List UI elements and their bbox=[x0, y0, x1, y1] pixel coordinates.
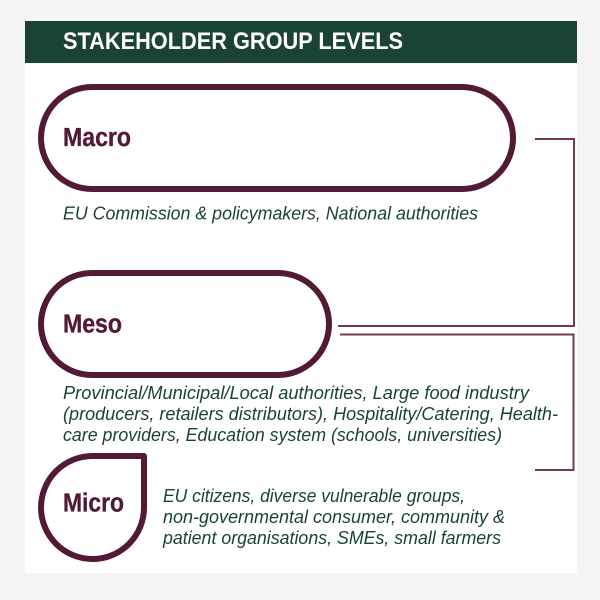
level: macro bbox=[41, 87, 513, 189]
meso description: (producers, retailers distributors), Hospitality/Catering, Health- bbox=[63, 403, 558, 424]
connector: macro to meso bbox=[338, 139, 574, 326]
level: meso: Meso bbox=[63, 310, 122, 338]
macro description: EU Commission & policymakers, National authorities bbox=[63, 202, 478, 224]
level: micro bbox=[41, 456, 144, 559]
connector: meso to micro bbox=[340, 334, 574, 470]
level: macro: Macro bbox=[63, 124, 131, 152]
micro description: non-governmental consumer, community & bbox=[163, 506, 505, 527]
level: micro: Micro bbox=[63, 490, 124, 518]
meso description bbox=[63, 382, 558, 445]
micro description bbox=[162, 485, 505, 548]
header band with title bbox=[25, 21, 577, 63]
meso description: care providers, Education system (schools, universities) bbox=[63, 424, 502, 445]
level: meso bbox=[41, 273, 329, 375]
header band with title: STAKEHOLDER GROUP LEVELS bbox=[63, 28, 403, 55]
meso description: Provincial/Municipal/Local authorities, Large food industry bbox=[63, 382, 531, 403]
micro description: EU citizens, diverse vulnerable groups, bbox=[163, 485, 465, 506]
micro description: patient organisations, SMEs, small farmers bbox=[162, 527, 501, 548]
